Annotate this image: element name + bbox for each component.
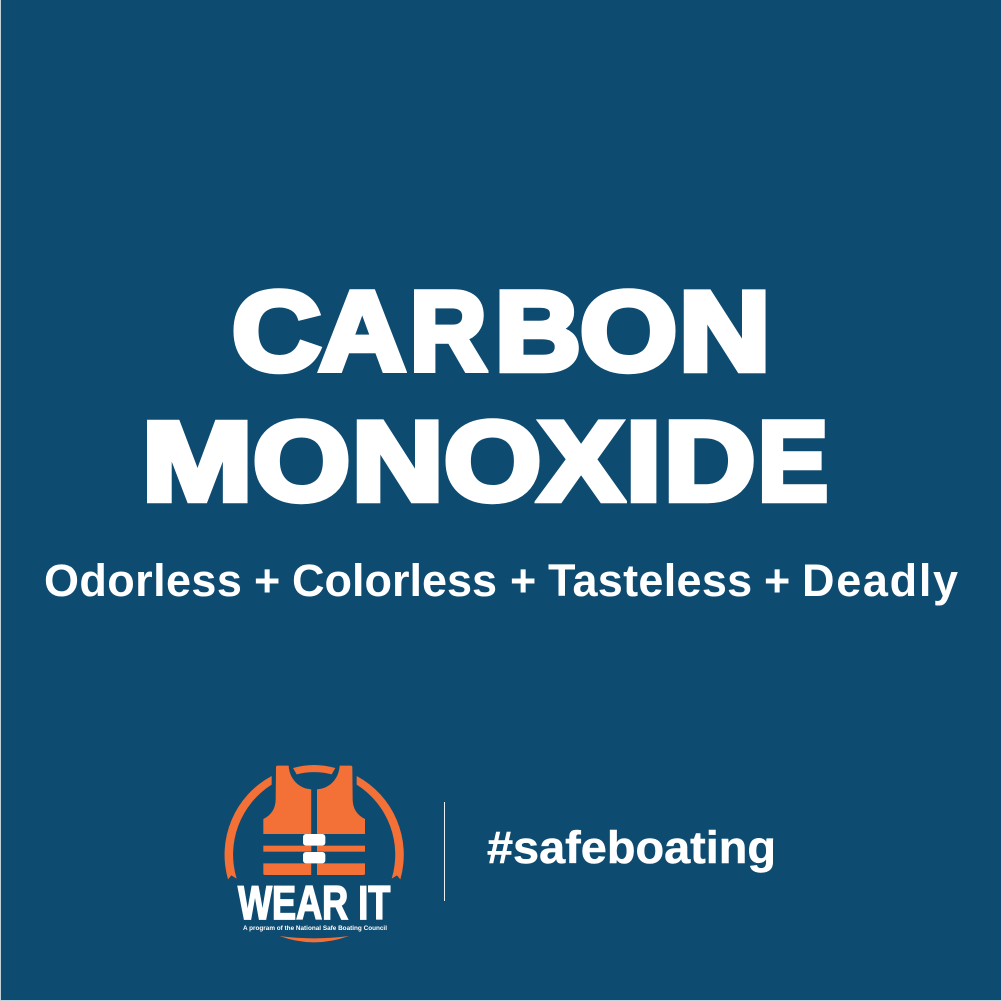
title: carbon monoxide: X xyxy=(539,399,623,524)
title: carbon monoxide: C xyxy=(232,269,320,394)
title: carbon monoxide: M xyxy=(142,399,253,524)
subtitle: odorless colorless tasteless deadly: + xyxy=(764,555,803,606)
title: carbon monoxide: N xyxy=(679,269,771,394)
life jacket buckles xyxy=(303,834,325,863)
title: carbon monoxide: D xyxy=(664,399,756,524)
title: carbon monoxide: N xyxy=(352,399,444,524)
logo ring: right arc xyxy=(357,776,404,879)
logo ring: bottom arc xyxy=(279,936,349,942)
subtitle: odorless colorless tasteless deadly: Colorless xyxy=(292,555,510,606)
title: carbon monoxide: O xyxy=(253,399,350,524)
logo: wear it life jacket xyxy=(225,765,404,942)
title: carbon monoxide: A xyxy=(319,269,406,394)
title: carbon monoxide: B xyxy=(495,269,580,394)
subtitle: odorless colorless tasteless deadly: + xyxy=(254,555,293,606)
subtitle: odorless colorless tasteless deadly: Deadly xyxy=(802,555,960,606)
logo ring: left arc xyxy=(225,776,272,879)
title: carbon monoxide: O xyxy=(580,269,677,394)
title: carbon monoxide: E xyxy=(758,399,828,524)
logo tagline: A program of the National Safe Boating Council xyxy=(243,925,387,932)
title: carbon monoxide: I xyxy=(626,399,661,524)
wear it wordmark: WEAR IT xyxy=(238,876,391,929)
divider xyxy=(444,802,445,901)
logo ring: top arc xyxy=(293,765,335,774)
life jacket vest xyxy=(263,766,365,876)
title: carbon monoxide: O xyxy=(444,399,541,524)
subtitle: odorless colorless tasteless deadly: Odorless xyxy=(44,555,255,606)
title: carbon monoxide xyxy=(142,269,828,524)
subtitle: odorless colorless tasteless deadly: + xyxy=(510,555,549,606)
title: carbon monoxide: R xyxy=(410,269,487,394)
hashtag: safeboating: #safeboating xyxy=(487,822,776,873)
subtitle: odorless colorless tasteless deadly: Tasteless xyxy=(548,555,765,606)
